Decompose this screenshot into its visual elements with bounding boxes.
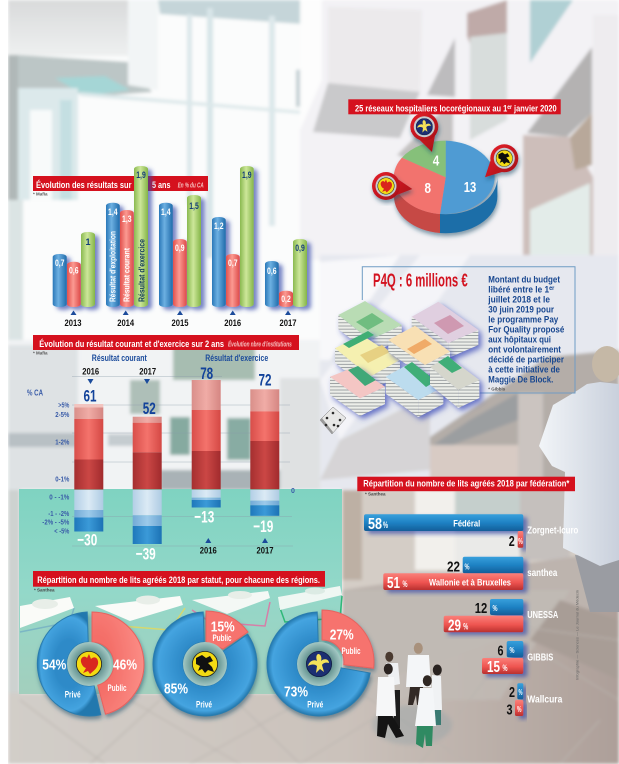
pie body (394, 141, 497, 233)
row: GIBBIS: 15 (487, 659, 500, 676)
upper years and markers: 2016 (82, 366, 99, 378)
row: Wallcura: 3 (506, 702, 512, 718)
row: GIBBIS: 6 (498, 642, 504, 660)
upper years and markers: 2017 (139, 366, 156, 378)
lower years and markers: 2016 (200, 546, 217, 556)
chart 5 heading (33, 571, 325, 592)
year axis: 2014 (117, 318, 135, 329)
donut: Flandre (153, 611, 257, 716)
donut: Bruxelles: Public (342, 646, 360, 656)
donut: Flandre: 15% (211, 618, 235, 636)
bar values: 0,2 (281, 294, 291, 304)
bar values: 0,9 (295, 243, 305, 253)
pie heading (348, 99, 561, 114)
chart 1 heading: 5 ans (152, 180, 170, 191)
axis labels (27, 388, 70, 536)
bar values: 1 (85, 237, 91, 247)
row: Zorgnet-Icuro: Fédéral (453, 518, 480, 530)
row: Wallcura: 2 (509, 684, 515, 701)
year group 2017 (265, 239, 307, 307)
negative totals: −19 (253, 517, 273, 536)
row: Zorgnet-Icuro: % (383, 520, 388, 530)
row: UNESSA (444, 599, 558, 634)
chart 2 heading: Évolution nbre d'institutions (228, 340, 292, 348)
row: GIBBIS: % (510, 645, 515, 655)
pie values: 4 (433, 152, 440, 170)
group of doctors (372, 643, 452, 748)
pie values (424, 152, 476, 197)
bar values: 0,6 (69, 266, 79, 276)
banknote stack: 20 (386, 362, 443, 417)
donut: Wallonie: Privé (65, 690, 81, 700)
year axis: 2016 (224, 318, 241, 329)
explanatory text: juillet 2018 et le (487, 294, 550, 304)
bar values: 0,7 (55, 258, 64, 268)
donut: Wallonie: 46% (113, 656, 137, 674)
axis labels: < -5% (54, 528, 70, 536)
negative totals: −13 (194, 508, 214, 526)
map pin: Flandre (485, 144, 518, 177)
positive totals: 72 (258, 370, 272, 390)
source: * Gibbis (488, 386, 506, 392)
row: Wallcura: % (518, 688, 522, 697)
lower years and markers: 0 (291, 488, 295, 495)
chart 1 heading: Évolution des résultats sur (36, 180, 132, 191)
explanatory text: For Quality proposé (488, 324, 564, 334)
dice icon (320, 407, 346, 434)
explanatory text: le programme Pay (488, 314, 559, 324)
series labels: Résultat d'exploitation (108, 231, 118, 302)
donut: Flandre: 85% (164, 680, 188, 698)
row: santhea: 22 (447, 558, 460, 576)
series labels: Résultat d'exercice (138, 239, 146, 302)
row: Zorgnet-Icuro: Zorgnet-Icuro (527, 526, 578, 536)
row: santhea: % (464, 562, 470, 572)
row: UNESSA: % (492, 603, 498, 613)
axis labels: -2% - -5% (42, 520, 70, 526)
P4Q heading: P4Q : 6 millions € (373, 270, 468, 290)
positive totals (84, 364, 272, 418)
series labels: Résultat courant (122, 248, 132, 302)
explanatory text: 30 juin 2019 pour (488, 304, 554, 314)
explanatory text: libéré entre le 1ᵉʳ (488, 284, 555, 294)
upper years and markers (82, 366, 156, 384)
chart 1 heading: En % du CA (178, 182, 204, 190)
negative totals: −30 (77, 530, 97, 550)
lower years and markers: 2017 (256, 546, 274, 556)
pie values: 8 (424, 180, 431, 197)
row: Wallcura (506, 683, 563, 718)
chart 3: pie, 25 réseaux hospitaliers (348, 99, 561, 233)
right foreground doctor from behind (539, 346, 619, 612)
explanatory text: ont volontairement (488, 344, 561, 354)
axis labels: -1 - -2% (48, 511, 70, 518)
bar values: 0,6 (267, 266, 277, 276)
map pin: Wallonie (372, 172, 412, 200)
banknote stack: 500 (412, 302, 478, 358)
chart 4: lits agréés par fédération (357, 477, 578, 718)
explanatory text: Montant du budget (488, 274, 560, 284)
stacked bar: résultat d'exercice 2017 (250, 389, 279, 516)
explanatory text (487, 274, 564, 384)
chart 2: Évolution du résultat courant et d'exercice (27, 335, 299, 564)
axis labels: 0-1% (55, 476, 70, 484)
group headings: Résultat courant (92, 353, 147, 364)
positive totals: 78 (200, 364, 213, 383)
year group 2016 (212, 166, 254, 307)
year axis: 2017 (280, 318, 296, 329)
bar values: 0,9 (175, 243, 185, 253)
negative totals (77, 508, 273, 564)
row: UNESSA: % (463, 622, 468, 632)
row: GIBBIS: % (502, 663, 508, 673)
stacked bar: résultat d'exercice 2016 (192, 380, 221, 508)
year axis (64, 310, 296, 329)
group headings: Résultat d'exercice (205, 353, 268, 364)
bar values: 1,4 (161, 207, 171, 217)
row: Wallcura: Wallcura (527, 694, 563, 706)
vertical credit: Infographie — Sciences — Le Journal du Médecin (574, 590, 580, 680)
row: GIBBIS: GIBBIS (527, 652, 554, 664)
axis labels: >5% (58, 402, 70, 410)
chart 2 heading: * Mafia (33, 350, 48, 356)
chart 5 heading: * Santhea (34, 588, 55, 592)
panel: P4Q (320, 267, 575, 434)
positive totals: 52 (143, 399, 156, 418)
row: Zorgnet-Icuro: 58 (368, 516, 382, 533)
positive totals: 61 (84, 386, 96, 406)
guide lines (72, 377, 293, 546)
banknote stack: 200 (335, 331, 400, 391)
year group 2014 (106, 166, 148, 307)
axis labels: 2-5% (55, 412, 70, 419)
year axis: 2015 (172, 318, 189, 329)
map pin: Bruxelles (410, 113, 438, 152)
chart 5 heading: Répartition du nombre de lits agréés 2018 par statut, pour chacune des régions. (37, 575, 320, 586)
banknote stack: 5 (430, 356, 479, 408)
stacked bar: résultat courant 2016 (74, 404, 103, 532)
series labels (108, 231, 146, 302)
negative totals: −39 (136, 544, 156, 564)
lower years and markers (200, 488, 295, 556)
bar values: 1,5 (189, 201, 199, 211)
bar values: 1,4 (108, 207, 118, 217)
year axis: 2013 (64, 318, 82, 329)
donut: Wallonie (37, 612, 144, 716)
row: Zorgnet-Icuro: % (518, 536, 523, 546)
row: UNESSA: 29 (448, 618, 461, 634)
explanatory text: décidé de participer (488, 354, 564, 364)
banknote stack: 100 (338, 301, 402, 354)
donut: Bruxelles: 27% (330, 626, 354, 644)
chart 1 heading: * Mafia (33, 192, 48, 196)
chart 4 heading: Répartition du nombre de lits agréés 2018 par fédération* (363, 479, 570, 490)
explanatory text: à cette initiative de (488, 364, 560, 374)
donut: Bruxelles: Privé (307, 700, 323, 710)
beds illustration (20, 586, 342, 632)
banknote stack: 10 (330, 366, 385, 416)
row: santhea: santhea (527, 568, 558, 579)
bar values: 1,9 (242, 170, 252, 180)
bar values (55, 170, 305, 304)
explanatory text: aux hôpitaux qui (488, 334, 551, 344)
row: GIBBIS (482, 641, 554, 676)
bar values: 1,2 (214, 221, 224, 231)
chart 5: lits agréés par statut par région (33, 571, 374, 716)
year group 2015 (159, 195, 201, 307)
chart 1 heading (33, 176, 208, 196)
row: UNESSA: 12 (475, 600, 487, 617)
stacked bar: résultat courant 2017 (133, 417, 162, 544)
donut: Bruxelles (267, 610, 374, 716)
chart 1: Évolution des résultats sur 5 ans (33, 166, 307, 329)
pie heading: 25 réseaux hospitaliers locorégionaux au 1ᵉʳ janvier 2020 (355, 104, 557, 114)
group headings (92, 353, 268, 364)
row: UNESSA: UNESSA (527, 610, 558, 621)
explanatory text: Maggie De Block. (488, 374, 553, 384)
donut: Flandre: Privé (196, 700, 212, 710)
chart 4 heading: * Santhea (365, 492, 386, 496)
row: Wallcura: % (517, 705, 522, 714)
donut: Bruxelles: 73% (284, 684, 308, 700)
year group 2013 (53, 232, 95, 307)
donut: Wallonie: Public (108, 683, 126, 693)
donut: Wallonie: 54% (42, 656, 66, 674)
row: santhea: % (402, 579, 408, 589)
chart 4 heading (357, 477, 575, 496)
row: santhea: 51 (387, 575, 400, 592)
bar values: 0,7 (228, 258, 238, 268)
chart 2 heading (33, 335, 299, 356)
bar values: 1,9 (136, 170, 146, 180)
axis labels: % CA (27, 388, 43, 398)
chart 2 heading: Évolution du résultat courant et d'exercice sur 2 ans (39, 339, 224, 350)
row: Zorgnet-Icuro (364, 514, 578, 550)
axis labels: 0 - -1% (49, 494, 70, 502)
row: santhea (383, 557, 558, 592)
row: Zorgnet-Icuro: 2 (509, 533, 515, 550)
bar values: 1,3 (122, 214, 132, 224)
axis labels: 1-2% (55, 440, 70, 446)
banknote stack: 50 (388, 326, 450, 377)
donut: Flandre: Public (212, 633, 232, 643)
teal panel behind lower-left charts (19, 489, 342, 694)
pie values: 13 (464, 179, 476, 196)
row: santhea: Wallonie et à Bruxelles (429, 578, 511, 588)
panel frame (362, 267, 575, 393)
